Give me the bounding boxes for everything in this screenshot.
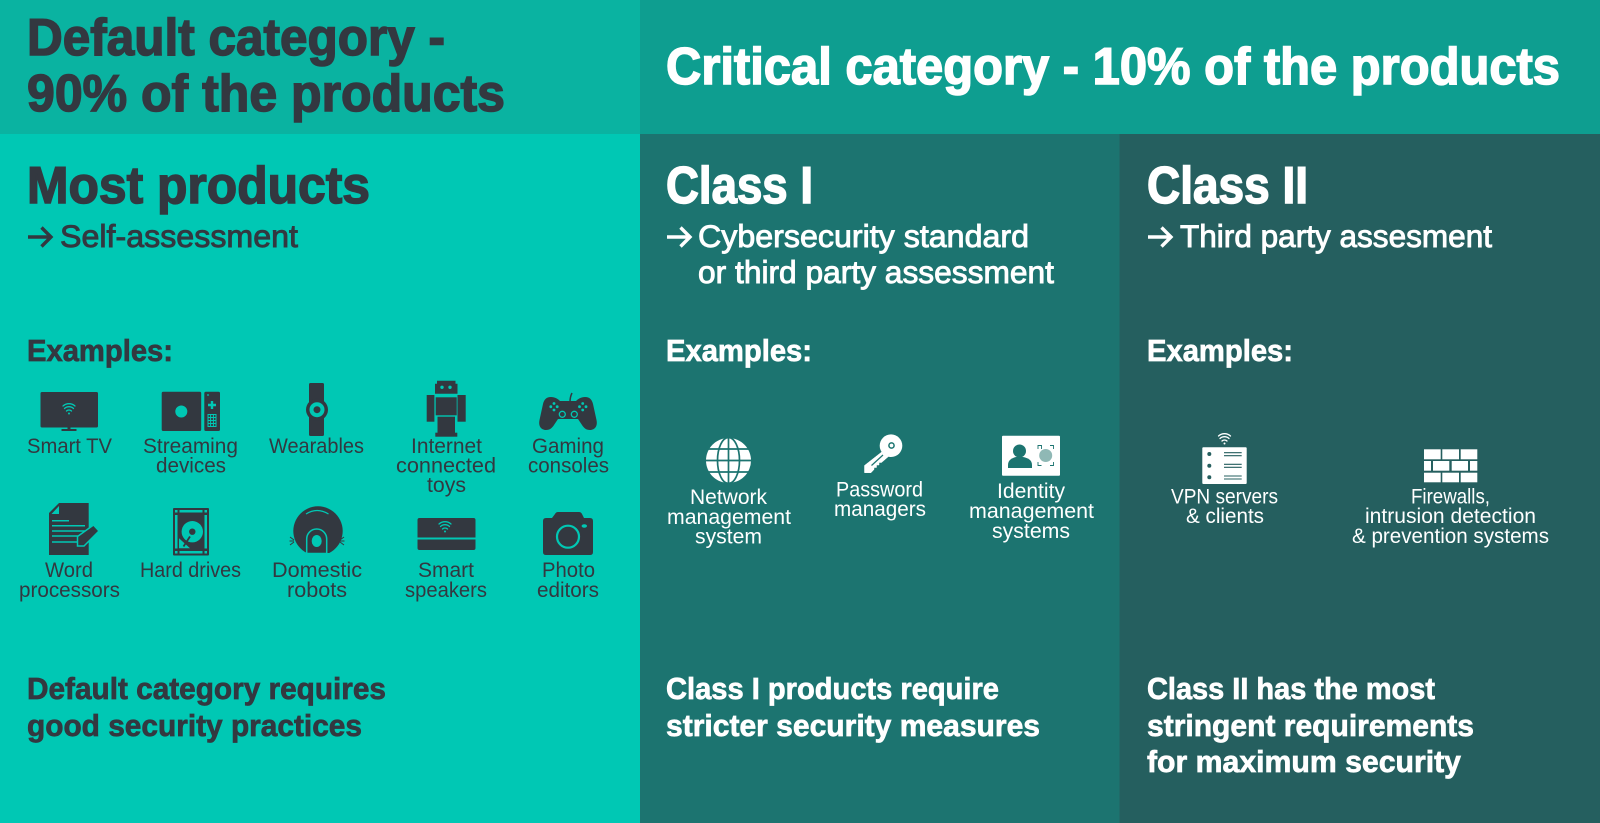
heading: most products: Most products [27, 157, 370, 215]
label: word processors [19, 558, 120, 602]
label: identity management systems: management [969, 499, 1094, 523]
text: class I assessment [698, 218, 1054, 290]
panel: class I [640, 134, 1120, 823]
label: internet connected toys [396, 434, 496, 497]
label: streaming devices: devices [156, 454, 226, 478]
label: smart TV: Smart TV [27, 434, 113, 458]
label: domestic robots [272, 558, 362, 602]
label: identity management systems [969, 479, 1094, 543]
label: photo editors: Photo [542, 558, 595, 582]
label: identity management systems: Identity [997, 479, 1065, 503]
icon: VPN server [1202, 434, 1247, 484]
heading: examples class I: Examples: [666, 334, 812, 368]
label: network management system: management [667, 505, 791, 529]
label: smart speakers [405, 558, 487, 602]
label: firewalls and intrusion systems: & prevention systems [1352, 524, 1549, 548]
icon: identity card [1002, 436, 1060, 476]
text: class II requirement: for maximum security [1147, 745, 1461, 779]
label: firewalls and intrusion systems: intrusion detection [1365, 504, 1536, 528]
label: gaming consoles: consoles [528, 454, 609, 478]
heading: class II: Class II [1147, 157, 1308, 215]
label: VPN servers and clients: & clients [1186, 504, 1264, 528]
panel: class II [1120, 134, 1600, 823]
heading: examples class II: Examples: [1147, 334, 1293, 368]
heading: critical category: Critical category - 10% of the products [666, 38, 1560, 96]
label: network management system: system [695, 524, 762, 548]
label: gaming consoles [528, 434, 609, 478]
panel: most products [0, 134, 640, 823]
icon: gaming consoles [539, 393, 597, 430]
text: class I requirement [666, 672, 1040, 743]
icon: internet connected toys [427, 381, 466, 437]
label: password managers [834, 478, 926, 521]
label: wearables: Wearables [269, 434, 364, 458]
heading: examples default: Examples: [27, 334, 173, 368]
label: gaming consoles: Gaming [532, 434, 604, 458]
heading: default category: 90% of the products [27, 65, 505, 123]
icon: domestic robots [290, 506, 344, 554]
label: streaming devices [143, 434, 238, 478]
label: domestic robots: robots [287, 578, 347, 602]
heading: default category: Default category - [27, 9, 445, 67]
icon: wearables [306, 383, 328, 436]
label: photo editors: editors [537, 578, 599, 602]
icon: photo editors [543, 512, 593, 555]
icon: smart speakers [418, 518, 476, 550]
panel: default category header [0, 0, 640, 134]
icon: network globe [705, 437, 752, 484]
label: network management system [667, 485, 791, 548]
icon: firewall [1424, 449, 1477, 482]
text: class I requirement: Class I products require [666, 672, 999, 706]
label: identity management systems: systems [992, 519, 1070, 543]
text: class II requirement [1147, 672, 1474, 779]
label: VPN servers and clients [1171, 484, 1278, 528]
label: password managers: Password [836, 478, 923, 502]
label: domestic robots: Domestic [272, 558, 362, 582]
label: smart speakers: speakers [405, 578, 487, 602]
label: word processors: Word [45, 558, 93, 582]
text: class II requirement: Class II has the most [1147, 672, 1435, 706]
label: word processors: processors [19, 578, 120, 602]
text: class I assessment: or third party assessment [698, 254, 1054, 290]
label: internet connected toys: connected [396, 454, 496, 478]
text: class I assessment: Cybersecurity standard [698, 218, 1029, 254]
label: password managers: managers [834, 497, 926, 521]
text: default category requirement: good security practices [27, 709, 362, 743]
icon: streaming devices [162, 392, 220, 431]
text: default category requirement: Default category requires [27, 672, 386, 706]
icon: hard drives [173, 508, 209, 556]
label: network management system: Network [690, 485, 767, 509]
icon: password key [864, 434, 902, 473]
panel: critical category header [640, 0, 1600, 134]
label: internet connected toys: toys [427, 473, 466, 497]
heading: class I: Class I [666, 157, 813, 215]
text: class II assessment: Third party assesment [1180, 218, 1492, 254]
arrow: class I assessment [667, 228, 690, 246]
icon: word processors [49, 503, 99, 555]
text: self-assessment: Self-assessment [60, 218, 298, 254]
label: photo editors [537, 558, 599, 602]
text: class I requirement: stricter security measures [666, 709, 1040, 743]
icon: smart TV [40, 392, 98, 431]
label: hard drives: Hard drives [140, 558, 241, 582]
label: internet connected toys: Internet [411, 434, 482, 458]
heading: default category [27, 9, 505, 123]
text: class II requirement: stringent requirements [1147, 709, 1474, 743]
arrow: self-assessment [28, 228, 51, 246]
label: firewalls and intrusion systems: Firewalls, [1411, 484, 1490, 508]
arrow: class II assessment [1148, 228, 1171, 246]
label: firewalls and intrusion systems [1352, 484, 1549, 548]
text: default category requirement [27, 672, 386, 743]
label: streaming devices: Streaming [143, 434, 238, 458]
label: VPN servers and clients: VPN servers [1171, 484, 1278, 508]
label: smart speakers: Smart [418, 558, 474, 582]
